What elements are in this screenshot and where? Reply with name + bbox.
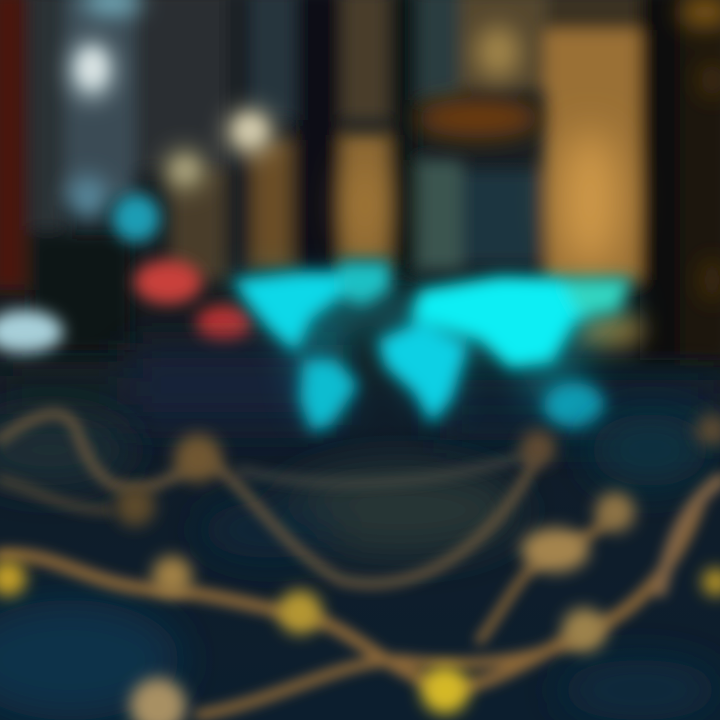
world map glow (230, 262, 632, 432)
gold network lines (0, 414, 720, 715)
australia (544, 383, 604, 427)
south america (300, 360, 358, 432)
glowing teal and white accents (0, 194, 160, 354)
africa (378, 322, 468, 424)
gold network nodes (0, 414, 720, 720)
amber window glows (349, 130, 620, 270)
eurasia (410, 276, 630, 368)
north america (232, 272, 342, 352)
red lights (134, 260, 252, 342)
dark mid band (0, 345, 720, 440)
lower network field (0, 414, 720, 720)
street lamps (68, 0, 274, 220)
upper building columns (0, 0, 720, 360)
